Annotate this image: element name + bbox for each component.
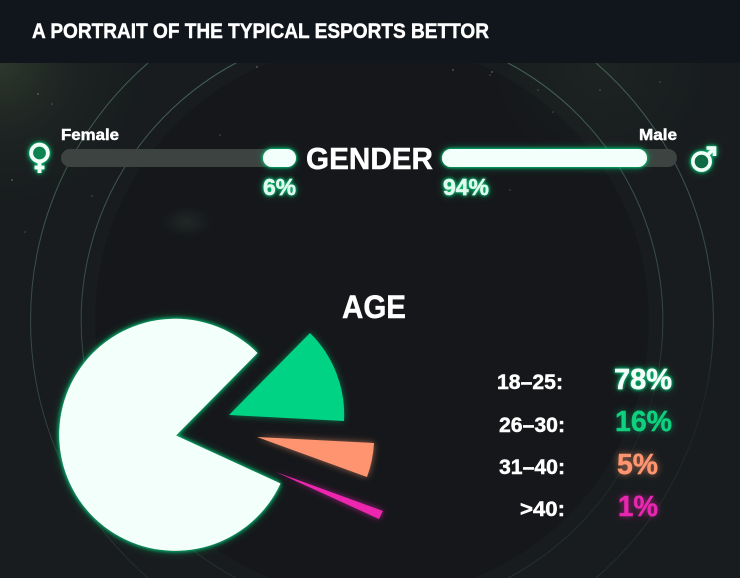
age table xyxy=(497,364,672,523)
row 31-40: 31–40: xyxy=(499,456,565,479)
male percentage: 94% xyxy=(443,174,489,200)
gender section xyxy=(31,127,714,200)
row 26-30 xyxy=(499,406,672,438)
heading: gender: GENDER xyxy=(306,141,433,176)
slice: 31-40 xyxy=(257,437,374,477)
row 31-40 xyxy=(499,449,658,481)
male bar xyxy=(442,149,677,167)
icon: male symbol xyxy=(693,148,714,170)
row 18-25: 78% xyxy=(614,364,672,396)
female percentage: 6% xyxy=(263,174,296,200)
label: Female: Female xyxy=(61,127,119,144)
slice: over 40 xyxy=(276,472,383,519)
header bar xyxy=(0,0,740,63)
row over 40 xyxy=(520,491,658,523)
row 26-30: 26–30: xyxy=(499,414,565,437)
slice: 18-25 xyxy=(59,319,280,551)
row 31-40: 5% xyxy=(617,449,658,481)
row 18-25 xyxy=(497,364,672,396)
row 26-30: 16% xyxy=(615,406,672,438)
label: Male: Male xyxy=(639,127,677,144)
slice: 26-30 xyxy=(229,333,344,421)
row 18-25: 18–25: xyxy=(497,371,563,394)
pie chart: age xyxy=(59,319,383,551)
icon: female symbol xyxy=(31,145,48,173)
row over 40: >40: xyxy=(520,498,565,521)
title: A PORTRAIT OF THE TYPICAL ESPORTS BETTOR xyxy=(32,20,489,43)
heading: age: AGE xyxy=(342,289,406,325)
row over 40: 1% xyxy=(618,491,658,523)
female bar xyxy=(61,149,297,167)
